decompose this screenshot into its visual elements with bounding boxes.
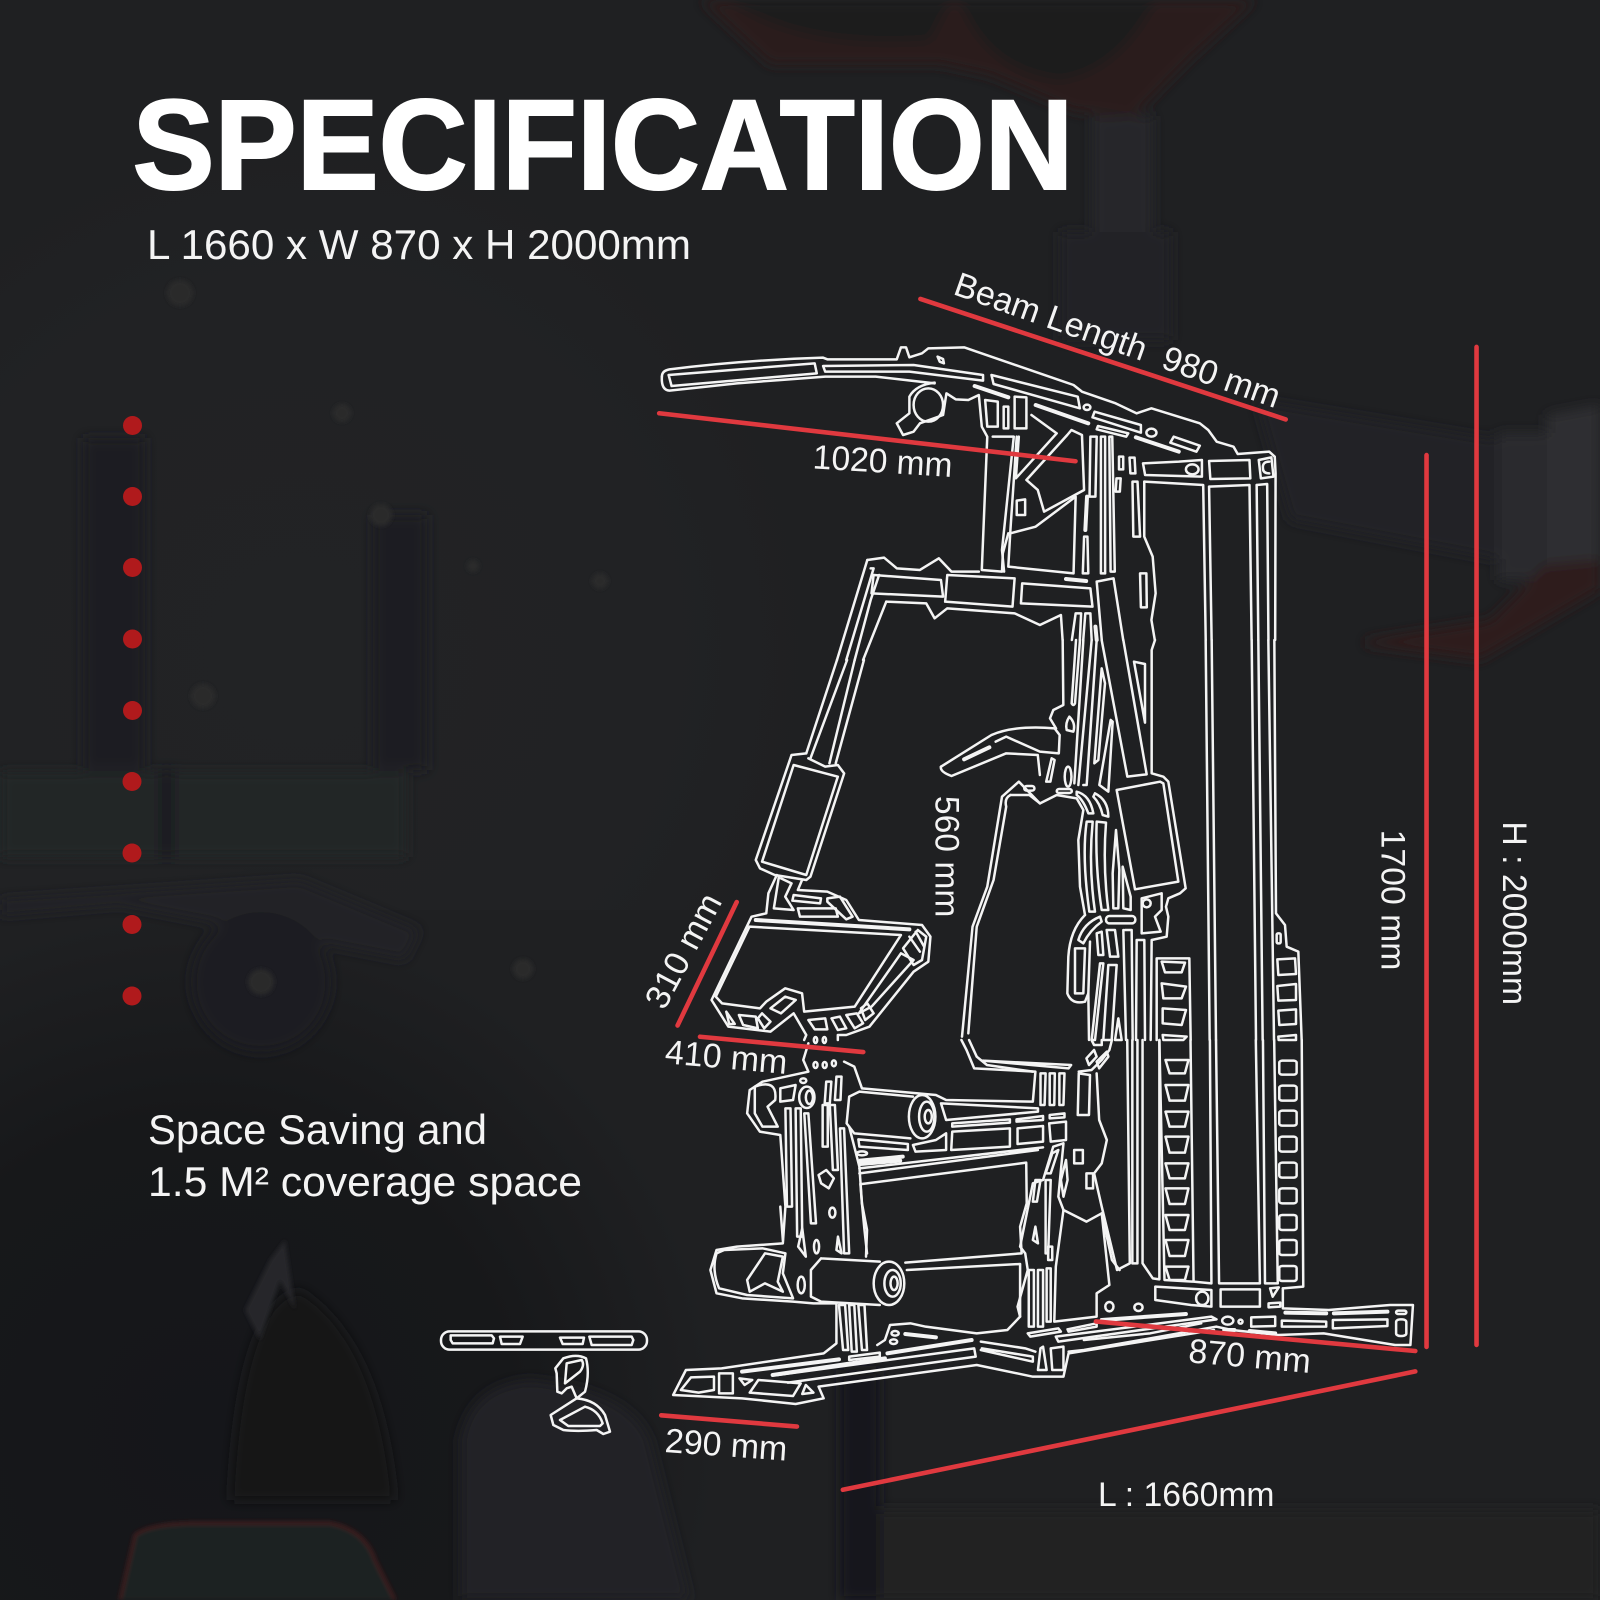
title: SPECIFICATION bbox=[132, 74, 1074, 217]
home gym line drawing bbox=[441, 347, 1413, 1434]
dimension labels: 410 mm bbox=[664, 1033, 789, 1082]
space saving note: 1.5 M² coverage space bbox=[148, 1158, 582, 1205]
dimension labels: 560 mm bbox=[928, 796, 966, 917]
detached accessory: bar and hand grips bbox=[441, 1331, 647, 1434]
dimension labels: Beam Length 980 mm bbox=[949, 266, 1285, 416]
dimension labels: 870 mm bbox=[1187, 1332, 1312, 1381]
machine cables, right pad and weight stacks bbox=[1040, 640, 1302, 1040]
red bullet dots bbox=[122, 416, 142, 1006]
dimension labels: H : 2000mm bbox=[1495, 821, 1533, 1005]
dimension labels: L : 1660mm bbox=[1098, 1476, 1274, 1514]
space saving note: Space Saving and bbox=[148, 1106, 487, 1153]
machine upper frame bbox=[662, 347, 1276, 660]
red dimension lines bbox=[659, 299, 1477, 1490]
dimension labels: 290 mm bbox=[664, 1422, 789, 1469]
dimension labels: 310 mm bbox=[638, 887, 730, 1015]
machine middle with seat and back pad bbox=[712, 660, 1072, 1043]
dimension labels bbox=[638, 266, 1533, 1514]
dimension labels: 1020 mm bbox=[812, 438, 954, 485]
dimension labels: 1700 mm bbox=[1374, 830, 1412, 970]
dimensions subtitle: L 1660 x W 870 x H 2000mm bbox=[147, 221, 691, 268]
machine base with rollers and legs bbox=[673, 1040, 1413, 1404]
